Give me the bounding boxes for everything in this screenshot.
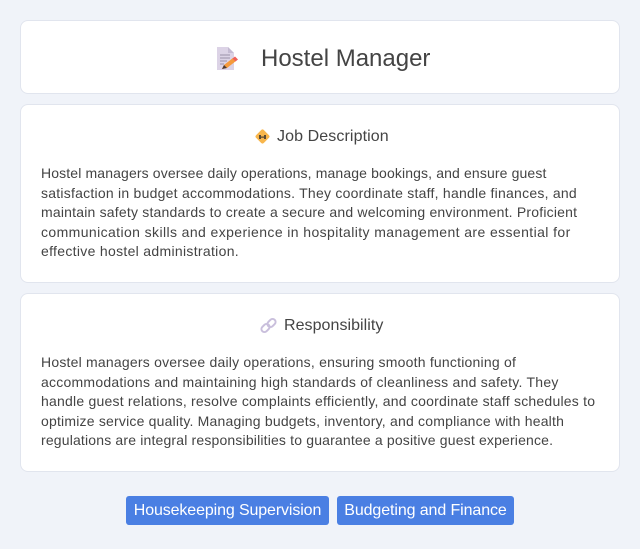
text: job description: maintain safety standards to create a secure and welcoming environment. Proficient (41, 204, 577, 220)
text: job description: satisfaction in budget accommodations. They coordinate staff, handle finances, and (41, 184, 577, 200)
text: responsibility: handle guest relations, resolve complaints efficiently, and coordinate staff schedules to (41, 393, 595, 409)
text: responsibility (41, 354, 595, 448)
tag: housekeeping supervision (126, 496, 329, 525)
text: job description: Hostel managers oversee daily operations, manage bookings, and ensure guest (41, 165, 546, 181)
text: job description: effective hostel administration. (41, 243, 239, 259)
tag: budgeting and finance (337, 496, 514, 525)
icon: document with pencil (217, 47, 238, 70)
tag: housekeeping supervision: Housekeeping Supervision (134, 502, 321, 519)
text: responsibility: Hostel managers oversee daily operations, ensuring smooth functioning of (41, 354, 516, 370)
heading: job description: Job Description (277, 128, 389, 145)
icon: chain link (260, 318, 276, 333)
heading: responsibility: Responsibility (284, 317, 383, 334)
text: job description (41, 165, 577, 259)
text: job description: communication skills and experience in hospitality management are essential for (41, 224, 571, 240)
text: responsibility: optimize service quality. Managing budgets, inventory, and compliance with health (41, 412, 564, 428)
tag: budgeting and finance: Budgeting and Finance (344, 502, 507, 519)
panel: job description (20, 104, 620, 283)
panel: responsibility (20, 293, 620, 472)
icon: job description diamond (256, 129, 270, 144)
text: responsibility: regulations are integral responsibilities to guarantee a positive guest experience. (41, 432, 553, 448)
title: Hostel Manager (261, 45, 430, 72)
panel: title (20, 20, 620, 94)
text: responsibility: accommodations and maintaining high standards of cleanliness and safety. They (41, 374, 559, 390)
